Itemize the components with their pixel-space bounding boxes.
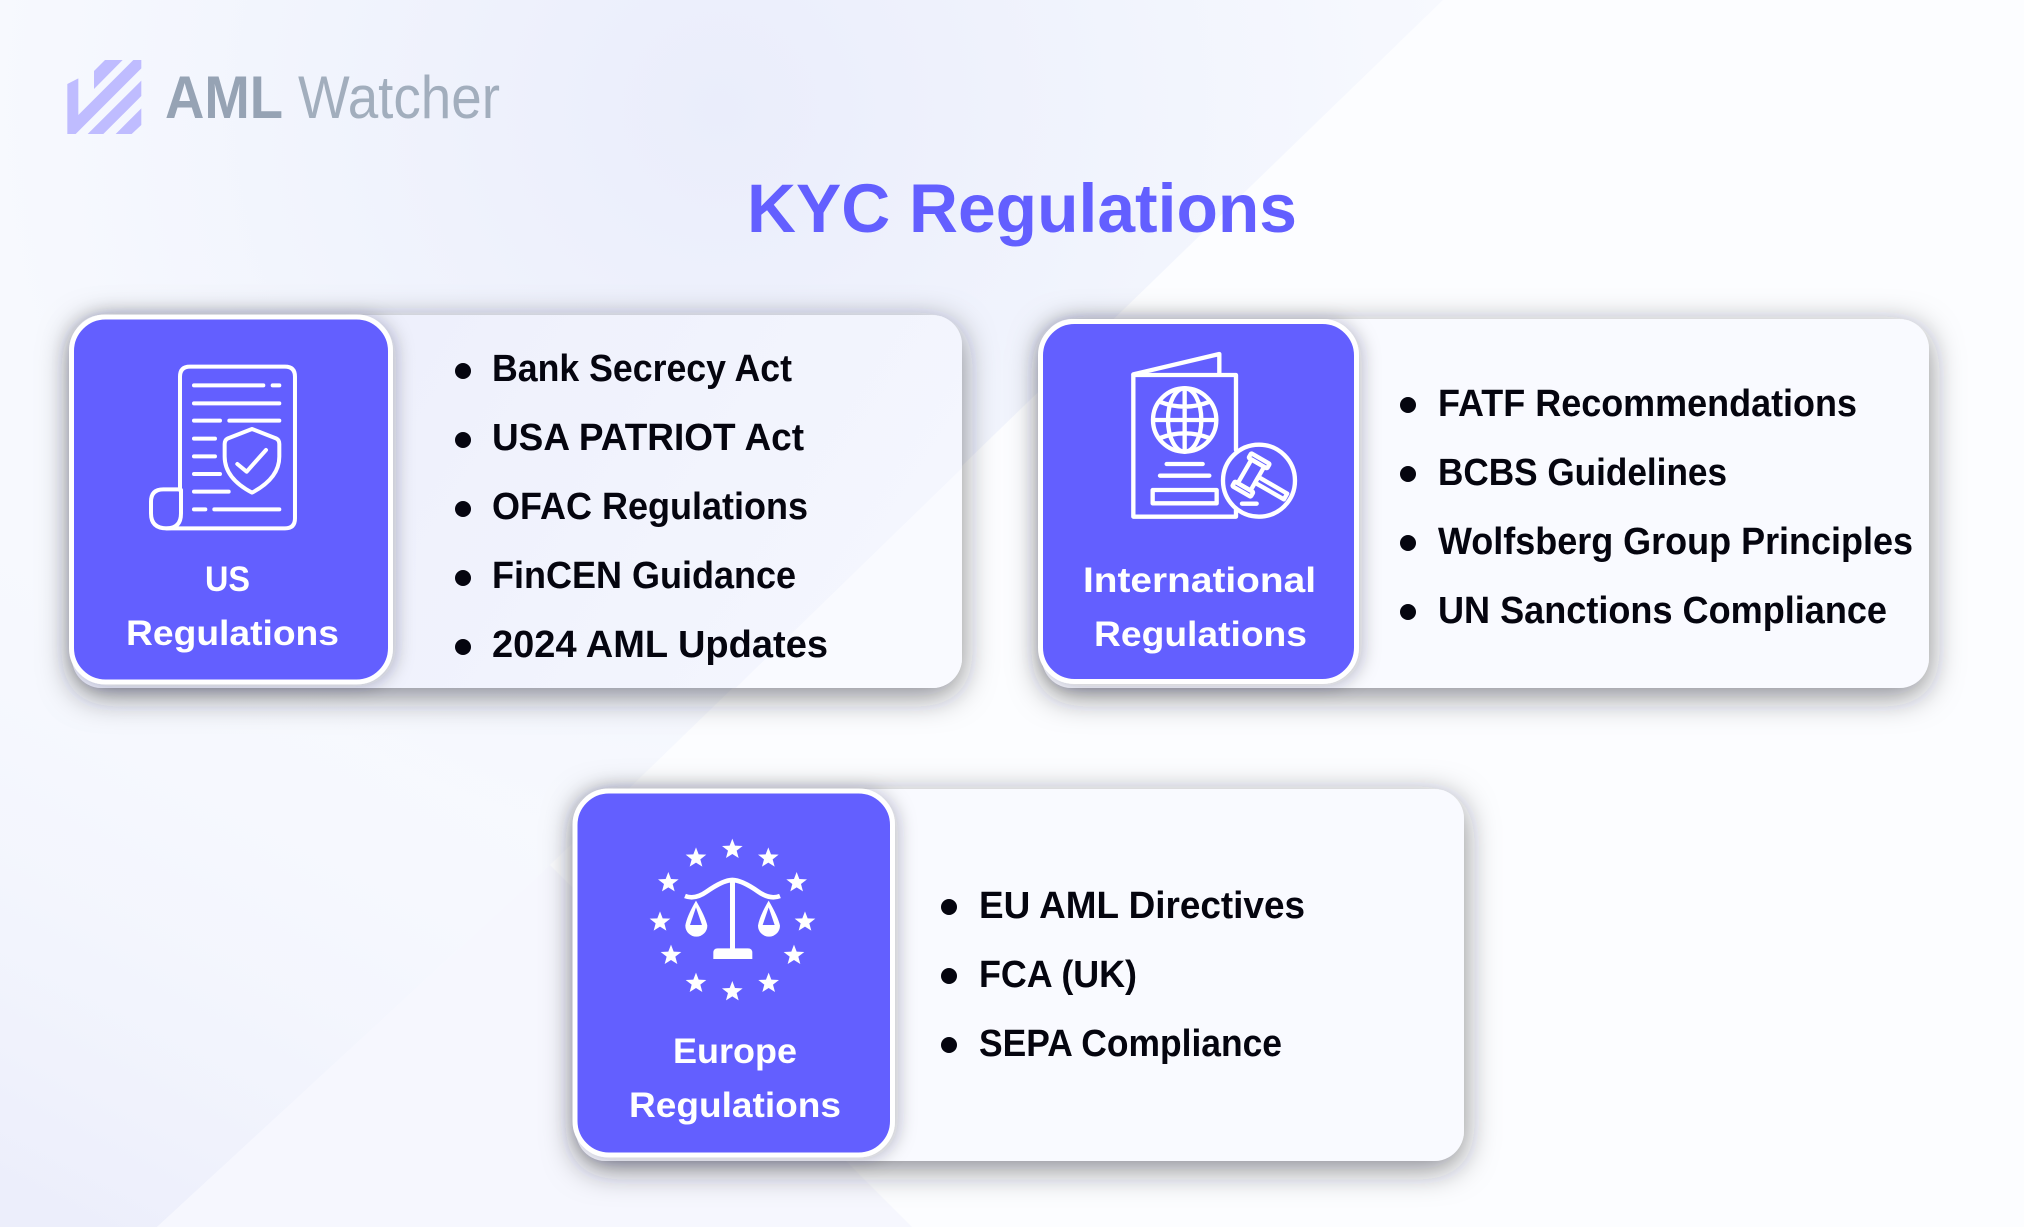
icon: logo stripes [67, 60, 141, 134]
label: Europe Regulations: Europe [673, 1032, 797, 1071]
list: US items [455, 348, 828, 666]
label tile [1040, 322, 1356, 682]
icon: passport with globe and gavel [1133, 354, 1296, 517]
card background [1042, 319, 1929, 688]
list: US items: USA PATRIOT Act [492, 417, 804, 459]
list: US items: 2024 AML Updates [492, 624, 828, 666]
logo: AML Watcher [67, 60, 500, 134]
list: US items: Bank Secrecy Act [492, 348, 792, 390]
icon: document with shield [151, 367, 295, 528]
label: US Regulations: US [205, 560, 250, 599]
icon: scales in EU star ring [650, 839, 815, 1000]
label: Europe Regulations [629, 1032, 841, 1125]
label tile [575, 791, 892, 1155]
logo wordmark: Watcher [298, 64, 500, 131]
list: US items: FinCEN Guidance [492, 555, 796, 597]
title: KYC Regulations [747, 170, 1297, 247]
list: Europe items [941, 885, 1305, 1065]
list: Europe items: FCA (UK) [979, 954, 1137, 996]
card background [49, 300, 985, 719]
list: International items: UN Sanctions Compliance [1438, 590, 1887, 632]
label: International Regulations: International [1083, 561, 1316, 600]
label: International Regulations [1083, 561, 1316, 654]
list: US items: OFAC Regulations [492, 486, 808, 528]
panel: Europe regulations [575, 789, 1464, 1161]
label: US Regulations [126, 560, 339, 653]
list: Europe items: SEPA Compliance [979, 1023, 1282, 1065]
label: International Regulations: Regulations [1094, 615, 1307, 654]
list: International items [1400, 383, 1913, 632]
logo wordmark: AML [165, 64, 283, 131]
panel: US regulations [49, 299, 985, 719]
list: International items: FATF Recommendations [1438, 383, 1857, 425]
card background [576, 789, 1464, 1161]
label tile [72, 317, 390, 682]
list: Europe items: EU AML Directives [979, 885, 1305, 927]
list: International items: BCBS Guidelines [1438, 452, 1727, 494]
panel: International regulations [1040, 319, 1929, 688]
list: International items: Wolfsberg Group Principles [1438, 521, 1913, 563]
label: US Regulations: Regulations [126, 614, 339, 653]
label: Europe Regulations: Regulations [629, 1086, 841, 1125]
